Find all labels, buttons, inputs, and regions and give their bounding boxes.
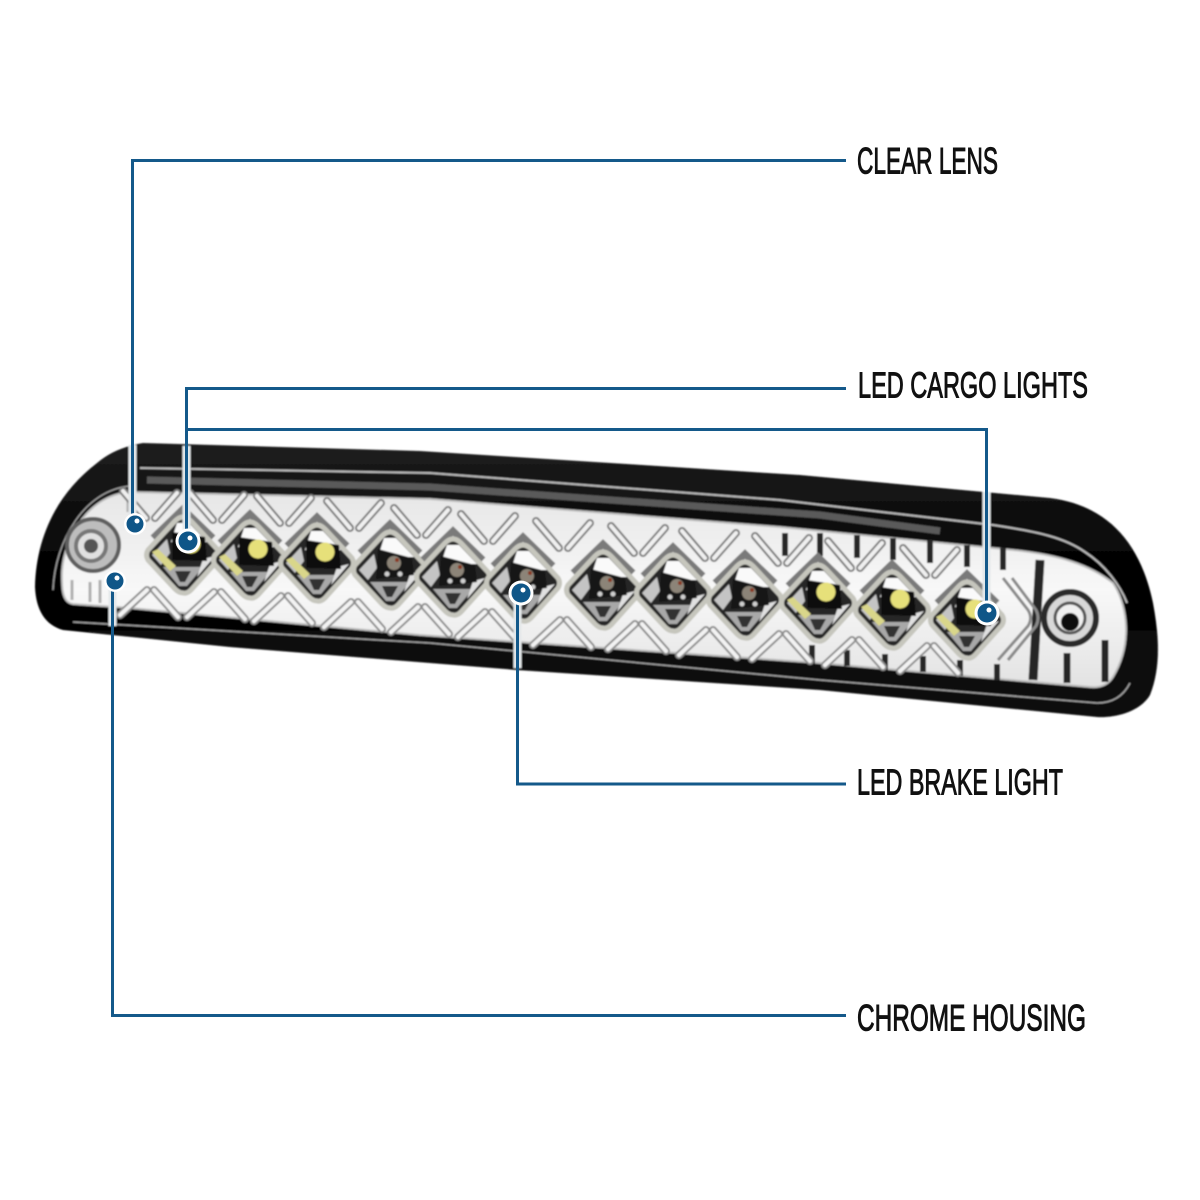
chrome housing leader line	[112, 581, 846, 1016]
upper lens chevrons	[123, 491, 957, 575]
housing silhouette	[35, 443, 1158, 717]
cargo lights dot left	[176, 528, 200, 554]
brake light label: LED BRAKE LIGHT	[857, 762, 1063, 802]
right mounting bolt	[1044, 592, 1096, 644]
clear lens dot	[124, 513, 146, 535]
clear lens label: CLEAR LENS	[857, 140, 998, 182]
right end chevron contour	[998, 578, 1038, 660]
left housing highlight	[53, 486, 130, 590]
lower housing highlight	[73, 622, 1130, 703]
cargo lights label: LED CARGO LIGHTS	[858, 364, 1088, 406]
callout: chrome housing	[104, 570, 1086, 1038]
callout: LED brake light	[508, 580, 1063, 802]
chrome housing dot	[104, 570, 126, 592]
cargo lights dot right	[974, 600, 1000, 626]
upper housing grey band	[147, 480, 940, 531]
lower lens chevrons	[120, 590, 958, 673]
brake light leader line	[518, 593, 846, 784]
chrome housing label: CHROME HOUSING	[857, 998, 1086, 1038]
left lens reflections	[72, 497, 128, 603]
leader line halos over product	[112, 445, 986, 668]
brake light dot	[508, 580, 534, 606]
clear lens leader line	[132, 160, 846, 524]
lens	[62, 492, 1126, 687]
callout: LED cargo lights	[176, 364, 1088, 626]
dark vertical reflections	[785, 533, 1105, 683]
product: LED third brake light	[35, 443, 1158, 717]
cargo lights leader lines	[186, 388, 986, 613]
upper housing highlight	[140, 468, 1127, 603]
LED diamonds	[146, 509, 1004, 658]
callout: clear lens	[124, 140, 998, 535]
left mounting bolt	[67, 519, 119, 571]
